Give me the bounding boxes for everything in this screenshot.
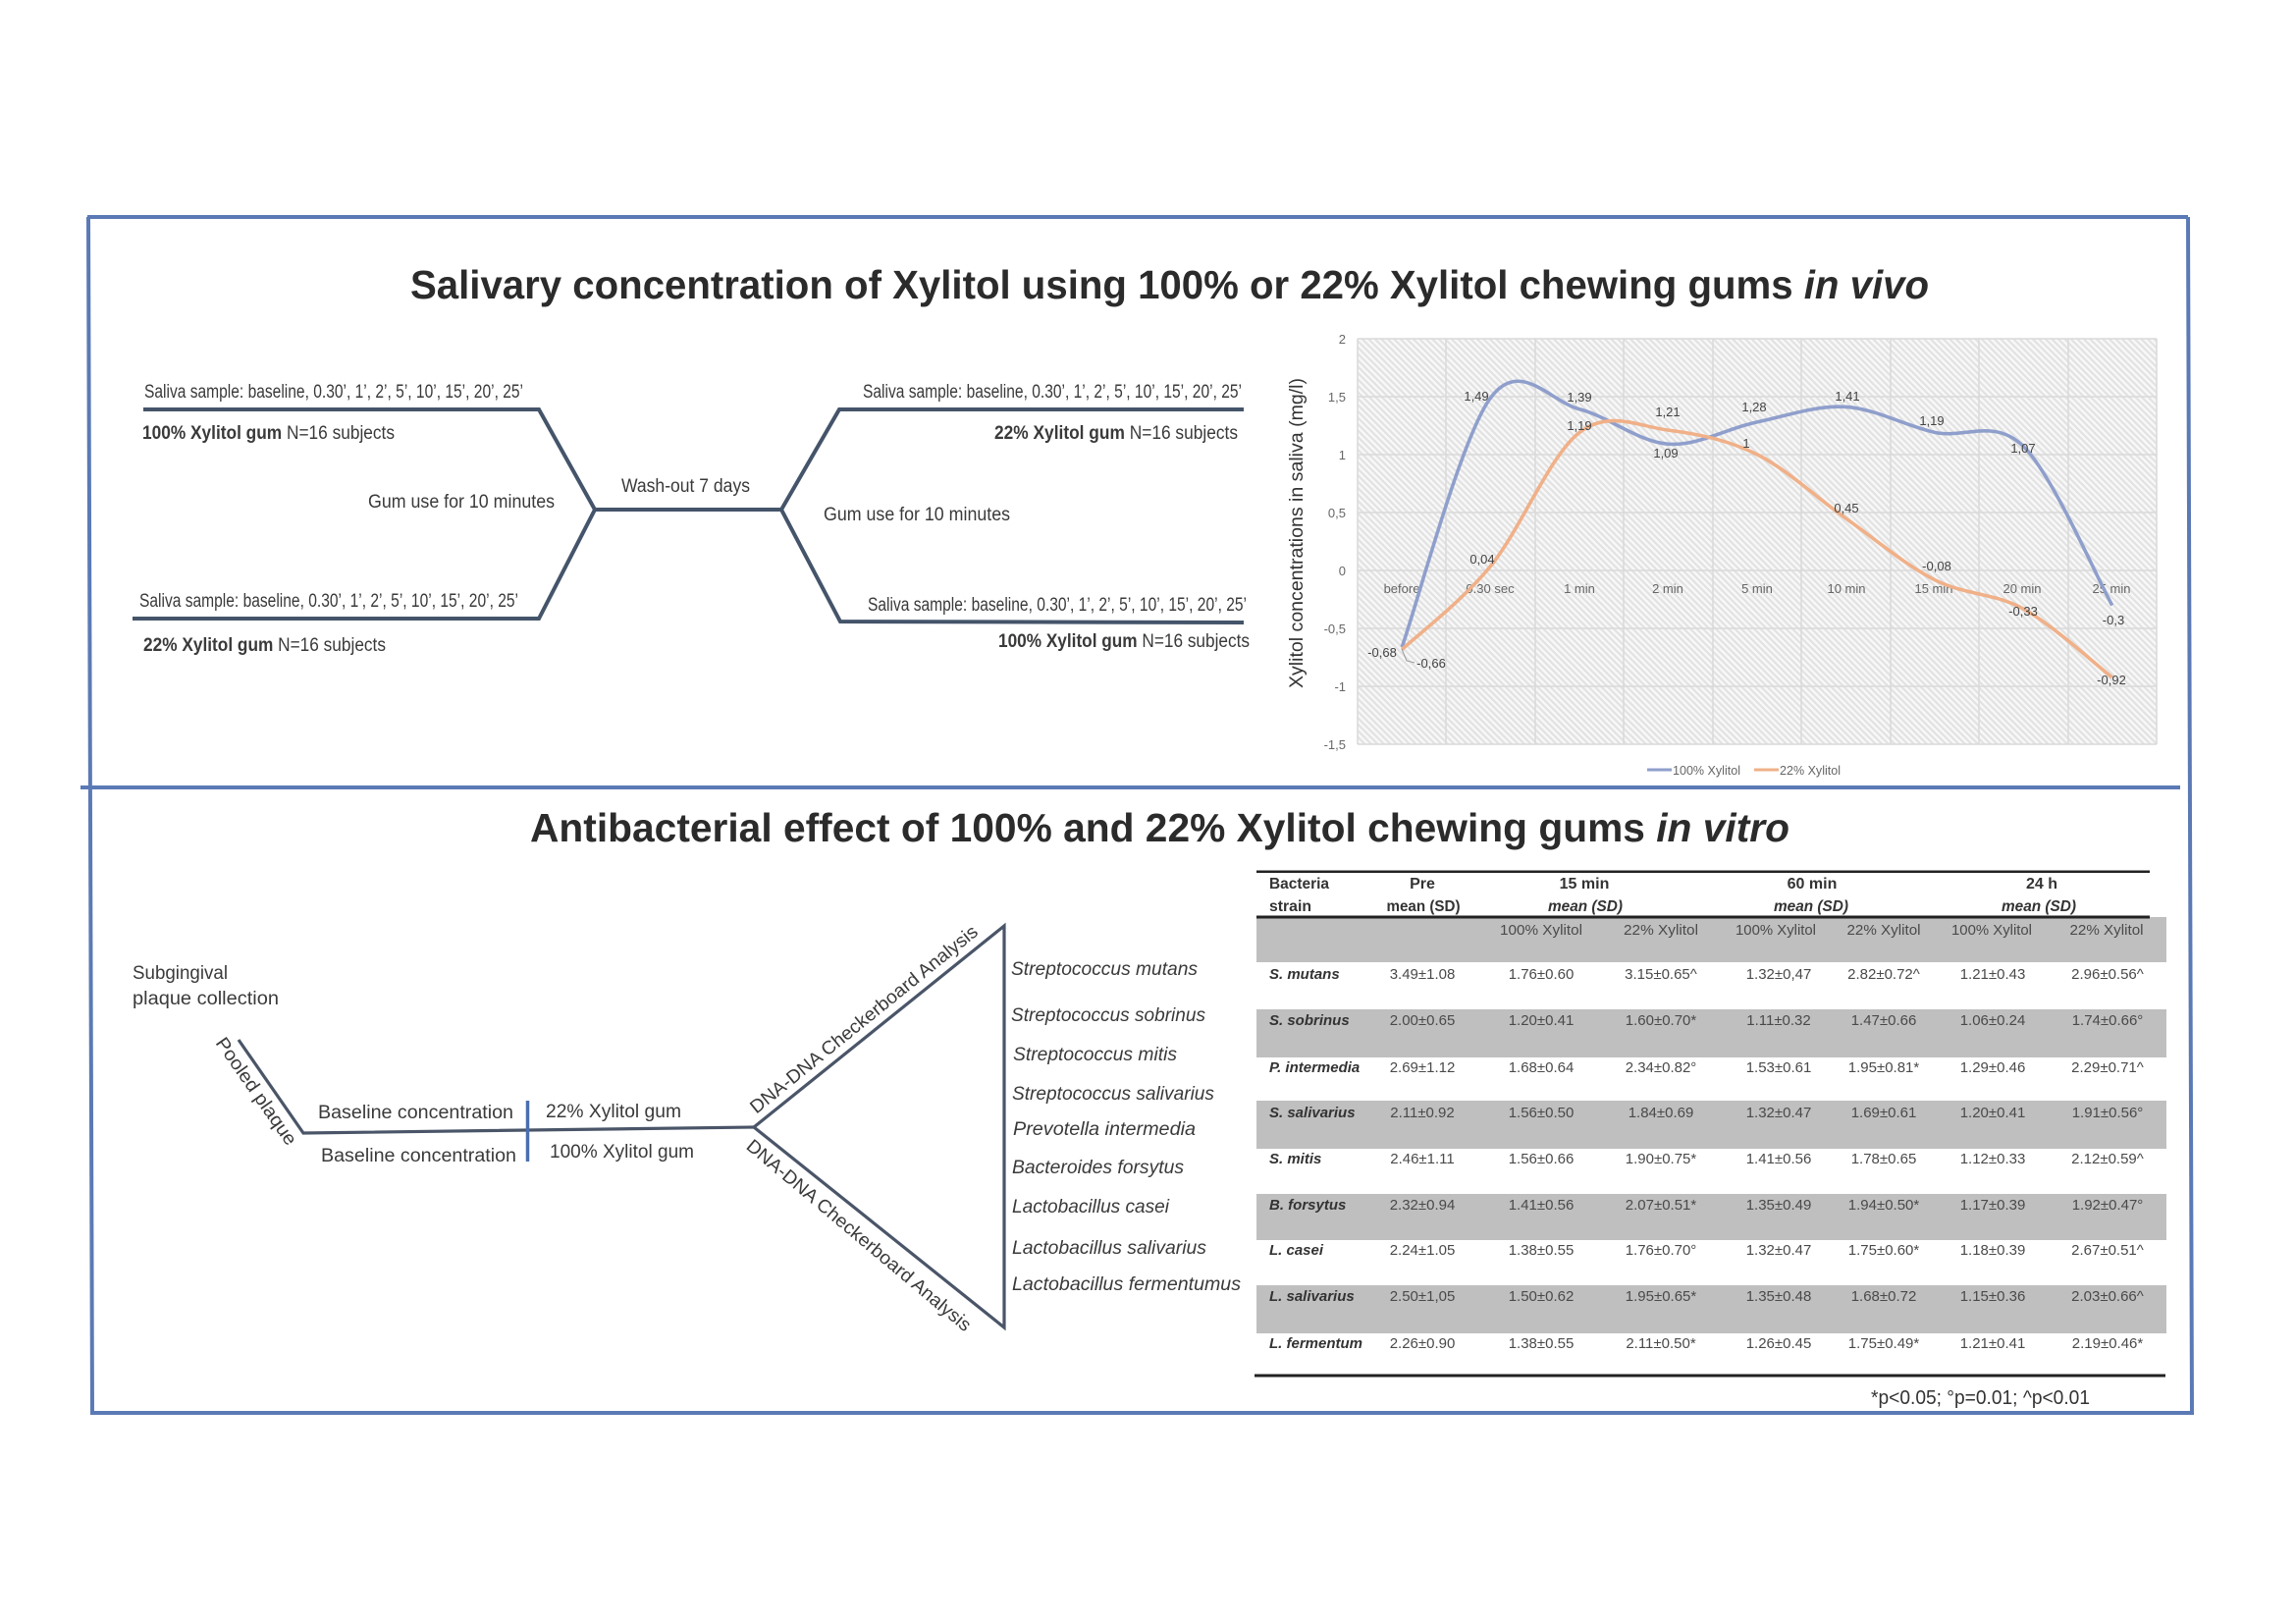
title: in vivo: Salivary concentration of Xylitol using 100% or 22% Xylitol chewing gums in vivo [410,262,1929,307]
row: S. mutans: 1.76±0.60 [1509,966,1574,983]
row: S. salivarius: 1.84±0.69 [1629,1105,1693,1121]
row: L. fermentum: 1.38±0.55 [1509,1335,1574,1352]
row: S. sobrinus: 1.11±0.32 [1746,1012,1811,1029]
checkerboard upper label: DNA-DNA Checkerboard Analysis [746,922,983,1118]
row: L. casei: 2.24±1.05 [1390,1242,1455,1259]
baseline lower: Baseline concentration [321,1146,516,1166]
sub-header row [1500,922,2144,939]
row: S. sobrinus: 1.20±0.41 [1509,1012,1574,1029]
species list: Lactobacillus salivarius [1012,1238,1206,1259]
row: S. sobrinus: 1.74±0.66° [2072,1012,2143,1029]
sub-header row: 100% Xylitol [1500,922,1582,939]
row: L. salivarius [1269,1288,2144,1305]
row: S. mitis: 1.90±0.75* [1626,1151,1696,1167]
row: S. mitis: 1.41±0.56 [1746,1151,1811,1167]
data labels: -0,3 [2103,613,2124,627]
line chart: xylitol concentrations in saliva [1287,332,2157,778]
row: S. salivarius: 1.69±0.61 [1851,1105,1916,1121]
data labels: -0,33 [2008,604,2038,619]
header row: strain [1269,898,1311,915]
row: L. casei: 2.67±0.51^ [2071,1242,2144,1259]
row: P. intermedia: 1.95±0.81* [1848,1059,1919,1076]
header row: Bacteria [1269,876,1329,893]
outer frame [80,217,2194,1414]
legend [1647,763,1841,778]
y-axis tick labels: -0,5 [1324,622,1346,636]
row: S. mutans: 3.49±1.08 [1390,966,1455,983]
species list: Streptococcus sobrinus [1011,1005,1205,1026]
wash-out label: Wash-out 7 days [621,476,750,497]
row: L. fermentum [1269,1335,2143,1352]
row: L. fermentum: 2.19±0.46* [2072,1335,2143,1352]
group label top right: 22% Xylitol gum N=16 subjects [994,423,1238,444]
y-axis tick labels: 1,5 [1328,390,1346,405]
row: P. intermedia: P. intermedia [1269,1059,1360,1076]
row: B. forsytus: 1.35±0.49 [1746,1197,1811,1214]
row: P. intermedia: 1.29±0.46 [1960,1059,2025,1076]
row: L. casei: L. casei [1269,1242,1324,1259]
data labels: 1,28 [1741,400,1767,414]
row: S. mutans: 2.82±0.72^ [1847,966,1920,983]
row: S. sobrinus: 1.47±0.66 [1851,1012,1916,1029]
checkerboard lower label: DNA-DNA Checkerboard Analysis [742,1136,975,1336]
row: P. intermedia: 1.68±0.64 [1509,1059,1574,1076]
row: L. casei [1269,1242,2144,1259]
row: P. intermedia: 2.69±1.12 [1390,1059,1455,1076]
data labels: -0,08 [1922,559,1951,573]
group label bottom left: 22% Xylitol gum N=16 subjects [143,635,386,656]
y-axis tick labels: -1,5 [1324,737,1346,752]
row: L. salivarius: 1.15±0.36 [1960,1288,2025,1305]
row: L. salivarius: 1.95±0.65* [1626,1288,1696,1305]
data labels: 1,21 [1655,405,1681,419]
sample label bottom right: Saliva sample: baseline, 0.30’, 1’, 2’, 5’, 10’, 15’, 20’, 25’ [868,595,1247,616]
row: L. casei: 1.38±0.55 [1509,1242,1574,1259]
row: S. sobrinus: 1.06±0.24 [1960,1012,2025,1029]
header row: 60 min [1788,876,1837,893]
species list: Streptococcus mutans [1011,959,1198,980]
plot background [1358,339,2157,744]
row: L. salivarius: 2.50±1,05 [1390,1288,1455,1305]
100 percent gum: 100% Xylitol gum [550,1142,694,1163]
data labels: 0,45 [1834,501,1859,515]
y-axis tick labels: 0 [1339,564,1346,578]
row: S. mutans: S. mutans [1269,966,1340,983]
header row [1269,876,2076,915]
row: S. salivarius: S. salivarius [1269,1105,1356,1121]
species list: Lactobacillus fermentumus [1012,1274,1242,1295]
category labels [1384,581,2131,596]
row: L. salivarius: 1.35±0.48 [1746,1288,1811,1305]
category labels: 25 min [2092,581,2131,596]
subgingival label: Subgingival [133,963,228,984]
leader line for -0,66 label [1402,649,1415,663]
y-axis tick labels: 1 [1339,448,1346,462]
row: L. salivarius: 2.03±0.66^ [2071,1288,2144,1305]
row: L. casei: 1.32±0.47 [1746,1242,1811,1259]
sub-header row: 22% Xylitol [1624,922,1698,939]
row: S. salivarius: 1.32±0.47 [1746,1105,1811,1121]
row: L. salivarius: L. salivarius [1269,1288,1355,1305]
group label bottom right: 100% Xylitol gum N=16 subjects [998,631,1250,652]
series: 100% Xylitol [1402,381,2112,647]
table: bacteria strains [1255,870,2166,1377]
sub-header row: 22% Xylitol [2069,922,2144,939]
data labels: 1,39 [1567,390,1592,405]
data labels: 1 [1742,436,1750,451]
header row: mean (SD) [1386,898,1461,915]
data labels: 1,09 [1653,446,1679,460]
series: 22% Xylitol [1402,421,2112,677]
row: L. fermentum: 2.26±0.90 [1390,1335,1455,1352]
data labels: 1,19 [1567,418,1592,433]
row: B. forsytus: 1.94±0.50* [1848,1197,1919,1214]
sample label bottom left: Saliva sample: baseline, 0.30’, 1’, 2’, 5’, 10’, 15’, 20’, 25’ [139,591,518,612]
row: L. casei: 1.75±0.60* [1848,1242,1919,1259]
sample label top left: Saliva sample: baseline, 0.30’, 1’, 2’, 5’, 10’, 15’, 20’, 25’ [144,382,523,403]
row: S. mitis: 1.56±0.66 [1509,1151,1574,1167]
species list: Streptococcus salivarius [1012,1084,1214,1105]
species list: Lactobacillus casei [1012,1197,1170,1217]
header row: 15 min [1560,876,1609,893]
category labels: 15 min [1914,581,1953,596]
group label top left: 100% Xylitol gum N=16 subjects [142,423,395,444]
header row: Pre [1410,876,1435,893]
header row: 24 h [2026,876,2057,893]
sample label top right: Saliva sample: baseline, 0.30’, 1’, 2’, 5’, 10’, 15’, 20’, 25’ [863,382,1242,403]
y-axis tick labels: -1 [1334,679,1346,694]
row: L. fermentum: 1.21±0.41 [1960,1335,2025,1352]
row: B. forsytus [1269,1197,2143,1214]
row: L. salivarius: 1.50±0.62 [1509,1288,1574,1305]
species list [1011,959,1242,1295]
row: S. mitis: 2.12±0.59^ [2071,1151,2144,1167]
row: L. fermentum: L. fermentum [1269,1335,1362,1352]
row: L. casei: 1.18±0.39 [1960,1242,2025,1259]
category labels: 1 min [1564,581,1595,596]
species list: Bacteroides forsytus [1012,1158,1184,1178]
row: S. mutans: 2.96±0.56^ [2071,966,2144,983]
row: S. mitis: 1.78±0.65 [1851,1151,1916,1167]
row: L. fermentum: 1.26±0.45 [1746,1335,1811,1352]
species list: Prevotella intermedia [1013,1119,1196,1140]
row: S. mutans: 1.32±0,47 [1746,966,1811,983]
row: S. salivarius: 2.11±0.92 [1390,1105,1455,1121]
row: S. mitis: 2.46±1.11 [1390,1151,1455,1167]
row: S. sobrinus: 1.60±0.70* [1626,1012,1696,1029]
row: S. mutans [1269,966,2144,983]
row: S. mitis [1269,1151,2144,1167]
data labels: 1,49 [1464,389,1489,404]
row: S. salivarius: 1.56±0.50 [1509,1105,1574,1121]
row: B. forsytus: 2.32±0.94 [1390,1197,1455,1214]
data labels: 1,07 [2010,441,2036,456]
data labels [1367,389,2126,687]
legend: 22% Xylitol [1780,763,1841,778]
category labels: before [1384,581,1419,596]
y-axis tick labels [1324,332,1346,752]
gum use left: Gum use for 10 minutes [368,492,555,513]
table rules [1255,870,2165,1377]
panel: in vitro flow diagram [133,922,1242,1336]
row: P. intermedia: 2.34±0.82° [1626,1059,1696,1076]
row: S. salivarius: 1.91±0.56° [2072,1105,2143,1121]
row: S. sobrinus [1269,1012,2143,1029]
row: S. sobrinus: S. sobrinus [1269,1012,1350,1029]
row: B. forsytus: 2.07±0.51* [1626,1197,1696,1214]
row: S. mutans: 3.15±0.65^ [1625,966,1697,983]
row: P. intermedia: 2.29±0.71^ [2071,1059,2144,1076]
y-axis title: Xylitol concentrations in saliva (mg/l) [1287,378,1308,688]
sub-header row: 22% Xylitol [1847,922,1920,939]
title: in vitro: Antibacterial effect of 100% and 22% Xylitol chewing gums in vitro [530,805,1789,850]
row: L. casei: 1.76±0.70° [1626,1242,1696,1259]
sub-header row: 100% Xylitol [1735,922,1816,939]
category labels: 5 min [1741,581,1773,596]
row: B. forsytus: 1.17±0.39 [1960,1197,2025,1214]
data labels: -0,66 [1416,656,1446,671]
data labels: 1,41 [1835,389,1860,404]
baseline upper: Baseline concentration [318,1103,513,1123]
row: P. intermedia: 1.53±0.61 [1746,1059,1811,1076]
row: L. fermentum: 2.11±0.50* [1626,1335,1696,1352]
y-axis tick labels: 2 [1339,332,1346,347]
flow lines [239,926,1004,1327]
row: B. forsytus: B. forsytus [1269,1197,1346,1214]
data labels: 0,04 [1469,552,1495,567]
panel: crossover study flow diagram [133,382,1250,656]
22 percent gum: 22% Xylitol gum [546,1102,681,1122]
category labels: 0.30 sec [1466,581,1515,596]
row: S. salivarius: 1.20±0.41 [1960,1105,2025,1121]
row: P. intermedia [1269,1059,2144,1076]
row: L. fermentum: 1.75±0.49* [1848,1335,1919,1352]
header row: mean (SD) [1548,898,1623,915]
sub-header row: 100% Xylitol [1951,922,2032,939]
row: S. mitis: S. mitis [1269,1151,1321,1167]
data labels: -0,92 [2097,673,2126,687]
row: S. mutans: 1.21±0.43 [1960,966,2025,983]
plaque collection label: plaque collection [133,989,279,1009]
category labels: 2 min [1652,581,1683,596]
row: S. mitis: 1.12±0.33 [1960,1151,2025,1167]
category labels: 20 min [2002,581,2042,596]
header row: mean (SD) [2002,898,2076,915]
row: L. salivarius: 1.68±0.72 [1851,1288,1916,1305]
connector lines [133,409,1244,622]
row: B. forsytus: 1.41±0.56 [1509,1197,1574,1214]
y-axis tick labels: 0,5 [1328,506,1346,520]
data labels: 1,19 [1919,413,1945,428]
row: S. sobrinus: 2.00±0.65 [1390,1012,1455,1029]
pooled plaque label: Pooled plaque [211,1034,300,1150]
row: B. forsytus: 1.92±0.47° [2072,1197,2143,1214]
category labels: 10 min [1827,581,1866,596]
gum use right: Gum use for 10 minutes [824,505,1010,525]
row: S. salivarius [1269,1105,2143,1121]
data labels: -0,68 [1367,645,1397,660]
legend: 100% Xylitol [1673,763,1740,778]
header row: mean (SD) [1774,898,1848,915]
shaded bands [1256,917,2166,1333]
footnote: significance key: *p<0.05; °p=0.01; ^p<0.01 [1871,1387,2090,1409]
species list: Streptococcus mitis [1013,1045,1177,1065]
